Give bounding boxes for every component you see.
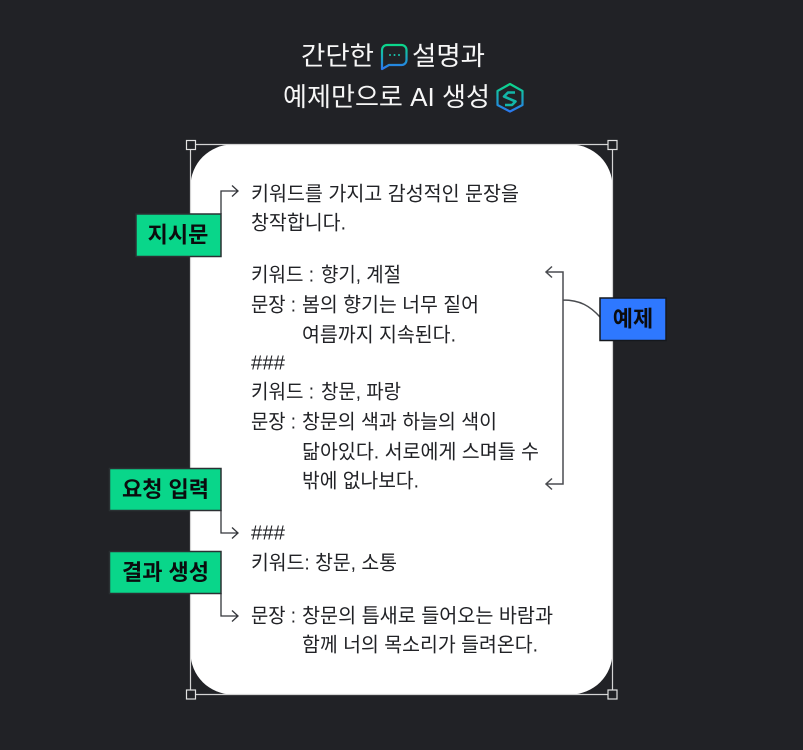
text: request input — [251, 522, 397, 574]
text: example two: 키워드 : — [251, 380, 314, 404]
text: example one: 키워드 : — [251, 264, 314, 286]
text: example two: 창문, 파랑 — [321, 380, 401, 404]
icon: chat bubble — [382, 45, 406, 69]
text: instruction — [251, 182, 519, 234]
text: request input: 키워드: 창문, 소통 — [251, 552, 397, 574]
text: example one — [251, 264, 479, 374]
icon: hexagon logo — [498, 84, 522, 112]
text: example two: 밖에 없나보다. — [302, 470, 419, 492]
text: example two: 문장 : — [251, 410, 296, 434]
label: request input: 요청 입력 — [122, 477, 209, 502]
text: example one: 문장 : — [251, 294, 296, 316]
text: example one: 여름까지 지속된다. — [302, 324, 456, 346]
label: example: 예제 — [613, 306, 653, 332]
arrow: instruction — [221, 186, 238, 214]
text: example one: ### — [251, 352, 286, 374]
label: generate result: 결과 생성 — [122, 560, 209, 585]
text: example two: 창문의 색과 하늘의 색이 — [302, 410, 497, 434]
arrow: request input — [221, 510, 238, 538]
text: generated result — [251, 604, 553, 656]
title — [283, 41, 490, 112]
label: generate result — [110, 552, 221, 594]
text: request input: ### — [251, 522, 286, 544]
label: request input — [110, 468, 221, 510]
arrow: examples bracket — [546, 266, 600, 490]
title: 설명과 — [412, 41, 485, 71]
text: generated result: 문장 : — [251, 604, 296, 628]
title: 예제만으로 AI 생성 — [283, 82, 490, 112]
label: example — [600, 298, 666, 340]
label: instruction — [136, 214, 221, 256]
arrow: generated result — [221, 593, 238, 622]
text: generated result: 창문의 틈새로 들어오는 바람과 — [302, 604, 553, 628]
text: example one: 봄의 향기는 너무 짙어 — [302, 294, 479, 316]
text: example two: 닮아있다. 서로에게 스며들 수 — [302, 440, 539, 464]
panel: prompt card — [186, 140, 617, 699]
text: generated result: 함께 너의 목소리가 들려온다. — [302, 634, 538, 656]
label: instruction: 지시문 — [148, 222, 208, 248]
text: example two — [251, 380, 539, 492]
text: example one: 향기, 계절 — [321, 264, 401, 286]
selection frame — [186, 140, 617, 699]
title: 간단한 — [301, 41, 374, 71]
text: instruction: 키워드를 가지고 감성적인 문장을 — [251, 182, 519, 206]
text: instruction: 창작합니다. — [251, 212, 346, 234]
